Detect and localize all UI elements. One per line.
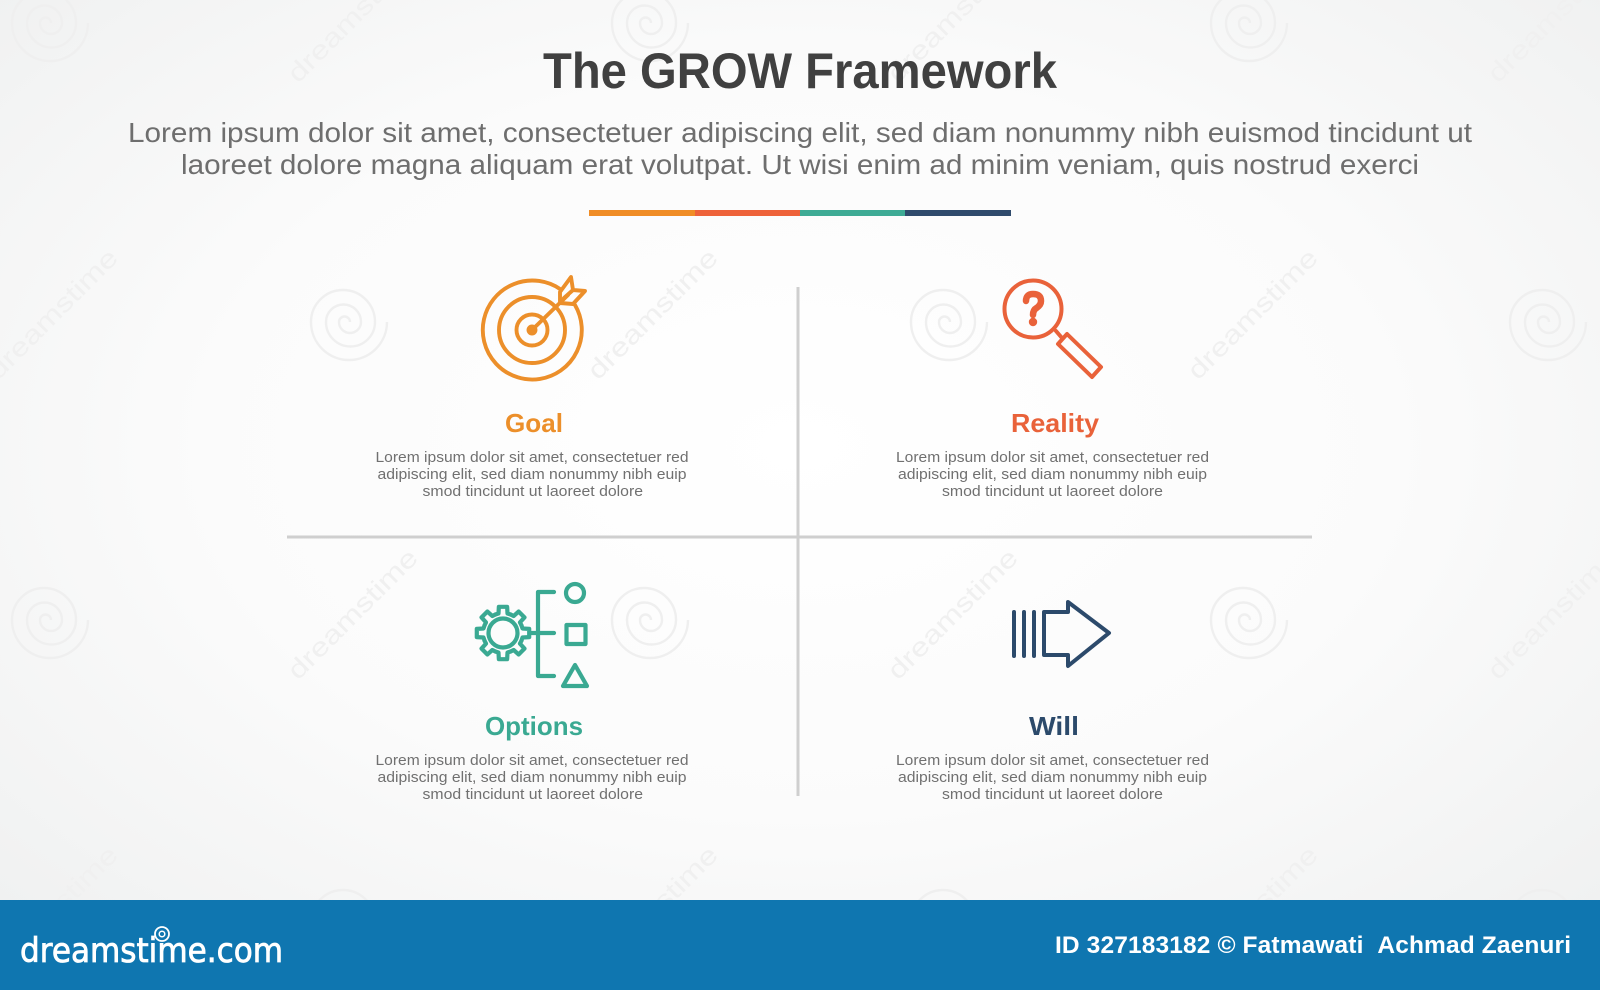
panel: reality bbox=[896, 280, 1209, 500]
four colour divider bar bbox=[589, 210, 1011, 216]
watermark pattern: dreamstime bbox=[281, 542, 424, 685]
heading: Reality: Reality bbox=[1011, 408, 1100, 438]
description: options: adipiscing elit, sed diam nonummy nibh euip bbox=[378, 769, 686, 786]
intro paragraph: Lorem ipsum dolor sit amet, consectetuer adipiscing elit, sed diam nonummy nibh euismod tincidunt ut bbox=[128, 117, 1472, 148]
description: goal: adipiscing elit, sed diam nonummy nibh euip bbox=[378, 466, 686, 483]
heading: Options: Options bbox=[485, 711, 583, 741]
description: will bbox=[896, 752, 1209, 803]
heading: Goal: Goal bbox=[505, 408, 563, 438]
intro paragraph: laoreet dolore magna aliquam erat volutpat. Ut wisi enim ad minim veniam, quis nostrud exerci bbox=[181, 149, 1419, 180]
description: options bbox=[376, 752, 688, 803]
description: goal bbox=[376, 449, 688, 500]
intro paragraph bbox=[128, 117, 1472, 180]
description: will: smod tincidunt ut laoreet dolore bbox=[942, 786, 1163, 803]
panel: options bbox=[376, 584, 688, 803]
description: will: adipiscing elit, sed diam nonummy nibh euip bbox=[898, 769, 1207, 786]
watermark pattern: dreamstime bbox=[581, 242, 724, 385]
description: reality bbox=[896, 449, 1209, 500]
watermark pattern: dreamstime bbox=[1181, 242, 1324, 385]
icon: magnifier with question mark bbox=[1004, 280, 1101, 377]
footer banner bbox=[0, 900, 1600, 990]
footer logo: dreamstime.com bbox=[20, 931, 283, 971]
watermark pattern: dreamstime bbox=[1481, 542, 1600, 685]
watermark pattern: dreamstime bbox=[1181, 839, 1324, 982]
description: options: Lorem ipsum dolor sit amet, consectetuer red bbox=[376, 752, 688, 769]
description: options: smod tincidunt ut laoreet dolore bbox=[422, 786, 643, 803]
icon: target with arrow bbox=[483, 277, 585, 380]
heading: Will: Will bbox=[1029, 711, 1079, 741]
description: reality: adipiscing elit, sed diam nonummy nibh euip bbox=[898, 466, 1207, 483]
description: goal: Lorem ipsum dolor sit amet, consectetuer red bbox=[376, 449, 688, 466]
footer credit: ID 327183182 © Fatmawati Achmad Zaenuri bbox=[1055, 932, 1571, 959]
quadrant cross lines bbox=[287, 287, 1312, 796]
icon: forward arrow with motion lines bbox=[1014, 602, 1109, 666]
panel: goal bbox=[376, 277, 688, 500]
description: will: Lorem ipsum dolor sit amet, consectetuer red bbox=[896, 752, 1209, 769]
title: The GROW Framework bbox=[543, 43, 1057, 99]
watermark pattern: dreamstime bbox=[581, 839, 724, 982]
icon: gear with branching shapes bbox=[477, 584, 587, 686]
description: reality: smod tincidunt ut laoreet dolore bbox=[942, 483, 1163, 500]
description: reality: Lorem ipsum dolor sit amet, consectetuer red bbox=[896, 449, 1209, 466]
watermark pattern: dreamstime bbox=[881, 542, 1024, 685]
panel: will bbox=[896, 602, 1209, 803]
description: goal: smod tincidunt ut laoreet dolore bbox=[422, 483, 643, 500]
